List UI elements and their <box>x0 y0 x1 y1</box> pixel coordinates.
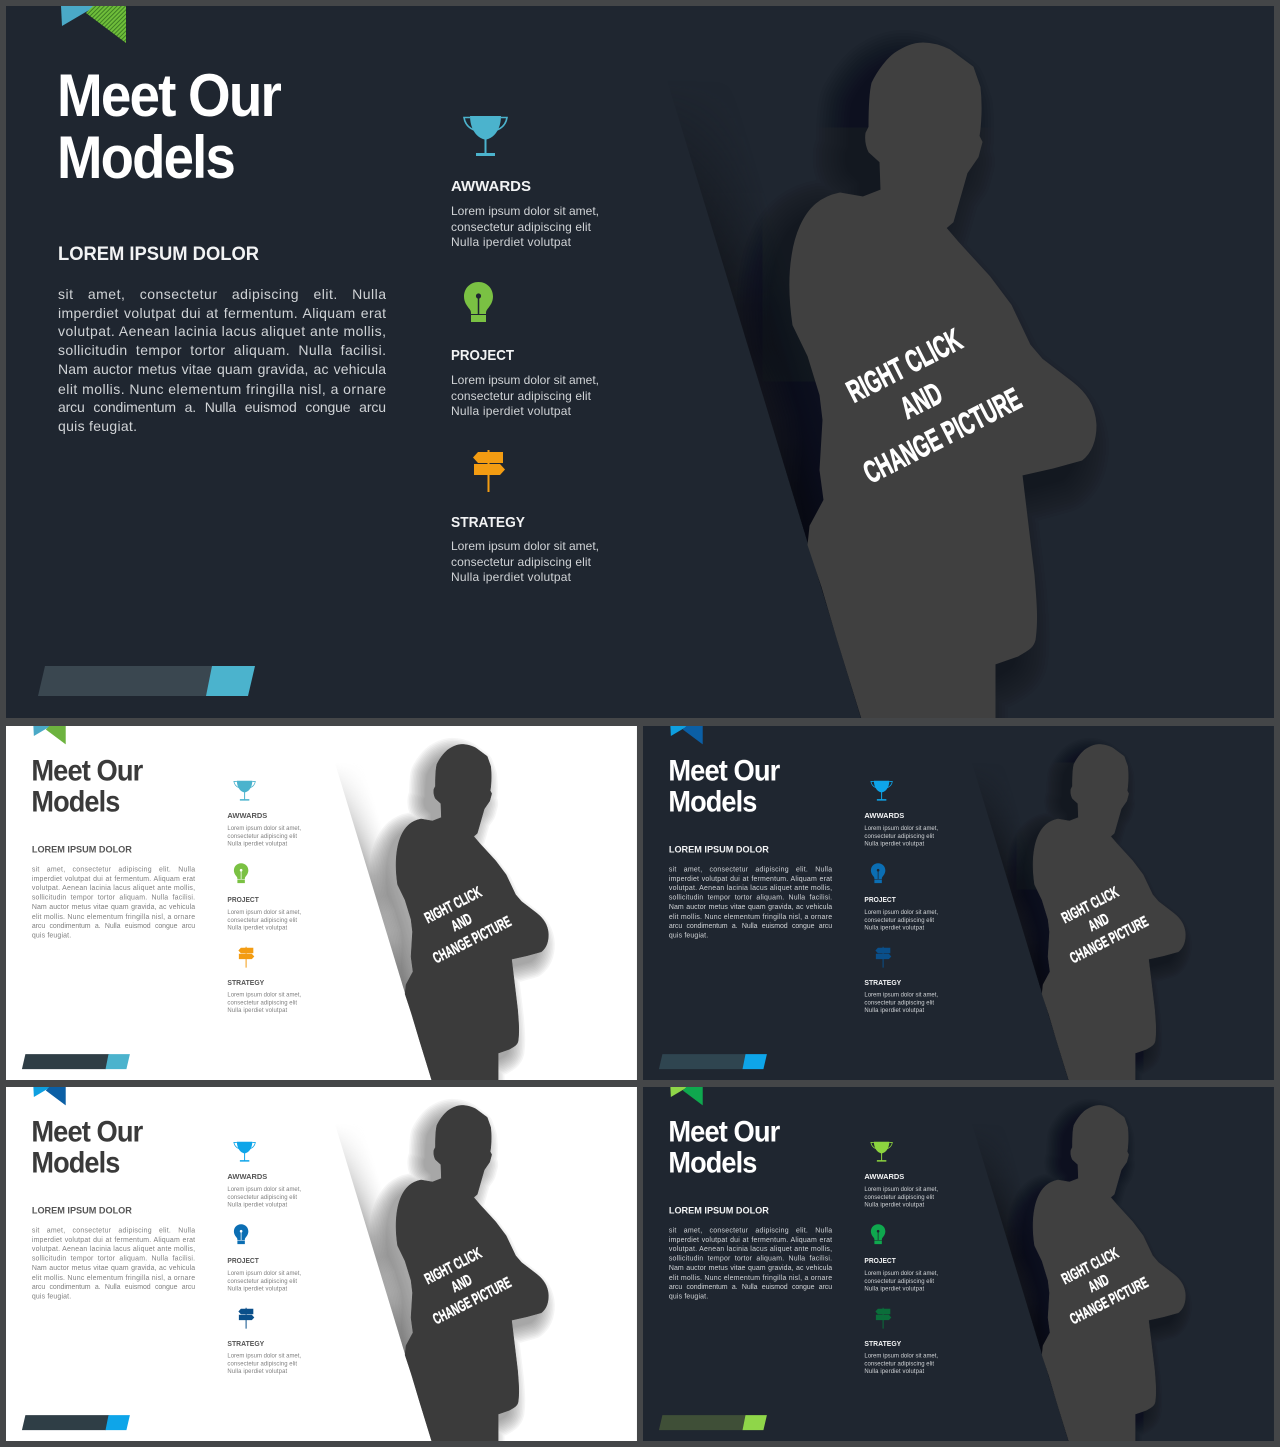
diagonal shadow <box>335 1124 504 1441</box>
item: project: Nulla iperdiet volutpat <box>451 404 572 418</box>
body text: elit mollis. Nunc elementum fringilla nisl, a ornare <box>669 914 832 921</box>
body text: elit mollis. Nunc elementum fringilla nisl, a ornare <box>669 1275 832 1282</box>
item: awwards <box>227 811 301 847</box>
item: awwards: AWWARDS <box>864 811 904 820</box>
icon: light bulb <box>871 1224 885 1244</box>
silhouette model <box>1033 744 1185 1081</box>
placeholder label <box>422 884 514 967</box>
accent bar <box>659 1415 767 1430</box>
body text: quis feugiat. <box>58 418 137 434</box>
item: project: Lorem ipsum dolor sit amet, <box>864 910 938 916</box>
body text: Nam auctor metus vitae quam gravida, ac vehicula <box>32 904 195 911</box>
placeholder label: RIGHT CLICK <box>841 322 968 409</box>
body text: volutpat. Aenean lacinia lacus aliquet ante mollis, <box>669 885 832 892</box>
title: Models <box>668 1147 757 1180</box>
item: project: consectetur adipiscing elit <box>864 918 934 924</box>
item: project <box>227 895 301 931</box>
item: project: Nulla iperdiet volutpat <box>227 1286 287 1292</box>
item: strategy: consectetur adipiscing elit <box>864 1000 934 1006</box>
placeholder label: CHANGE PICTURE <box>1067 1274 1151 1328</box>
body text: Nam auctor metus vitae quam gravida, ac vehicula <box>669 1265 832 1272</box>
accent bar <box>659 1054 767 1069</box>
item: awwards: consectetur adipiscing elit <box>451 220 592 234</box>
silhouette shadow <box>1023 1115 1175 1447</box>
item: awwards <box>451 178 599 249</box>
item: awwards: AWWARDS <box>451 178 531 195</box>
placeholder label: RIGHT CLICK <box>422 1245 485 1288</box>
body text: sit amet, consectetur adipiscing elit. Nulla <box>669 1228 832 1235</box>
item: awwards: Lorem ipsum dolor sit amet, <box>227 826 301 832</box>
title <box>33 760 143 812</box>
body text: quis feugiat. <box>32 932 71 939</box>
diagonal shadow <box>972 763 1141 1080</box>
item: strategy: Lorem ipsum dolor sit amet, <box>227 1353 301 1359</box>
item: awwards: Lorem ipsum dolor sit amet, <box>864 826 938 832</box>
body text: Nam auctor metus vitae quam gravida, ac vehicula <box>669 904 832 911</box>
accent bar <box>38 666 255 696</box>
item: strategy: STRATEGY <box>864 1339 901 1348</box>
body text <box>58 286 386 434</box>
placeholder label: AND <box>1086 911 1112 935</box>
body text: imperdiet volutpat dui at fermentum. Aliquam erat <box>32 876 195 883</box>
item: strategy <box>227 1339 301 1375</box>
item: project: Lorem ipsum dolor sit amet, <box>864 1271 938 1277</box>
icon: trophy <box>871 1142 892 1162</box>
item: strategy: Nulla iperdiet volutpat <box>451 570 572 584</box>
silhouette model <box>396 1105 548 1442</box>
item: project: Lorem ipsum dolor sit amet, <box>227 910 301 916</box>
body text: arcu condimentum a. Nulla euismod congue arcu <box>58 399 386 415</box>
title: Models <box>31 786 120 819</box>
body text: arcu condimentum a. Nulla euismod congue arcu <box>669 923 832 930</box>
item: strategy: STRATEGY <box>227 978 264 987</box>
item: awwards <box>227 1172 301 1208</box>
body text: elit mollis. Nunc elementum fringilla nisl, a ornare <box>32 914 195 921</box>
item: strategy: Lorem ipsum dolor sit amet, <box>451 539 599 553</box>
item: awwards: Nulla iperdiet volutpat <box>227 841 287 847</box>
item: project: Lorem ipsum dolor sit amet, <box>227 1271 301 1277</box>
subheading: LOREM IPSUM DOLOR <box>32 1205 132 1216</box>
body text: Nam auctor metus vitae quam gravida, ac vehicula <box>58 361 386 377</box>
title: Models <box>668 786 757 819</box>
body text: sit amet, consectetur adipiscing elit. Nulla <box>58 286 386 302</box>
body text: sollicitudin tempor tortor aliquam. Nulla facilisi. <box>669 895 832 902</box>
body text: quis feugiat. <box>669 1293 708 1300</box>
ribbon logo <box>33 726 66 744</box>
icon: signpost <box>238 1308 254 1329</box>
body text: imperdiet volutpat dui at fermentum. Aliquam erat <box>669 876 832 883</box>
item: awwards: Lorem ipsum dolor sit amet, <box>227 1187 301 1193</box>
placeholder label: AND <box>449 911 475 935</box>
silhouette shadow <box>386 1115 538 1447</box>
item: awwards: consectetur adipiscing elit <box>227 1195 297 1201</box>
body text: Nam auctor metus vitae quam gravida, ac vehicula <box>32 1265 195 1272</box>
placeholder label <box>844 327 1024 482</box>
panel: dark slide, green theme <box>643 1087 1274 1447</box>
placeholder label: RIGHT CLICK <box>422 884 485 927</box>
icon: light bulb <box>871 863 885 883</box>
ribbon logo <box>61 6 126 43</box>
item: project: PROJECT <box>451 347 514 364</box>
title: Meet Our <box>668 1116 781 1149</box>
icon: signpost <box>875 947 891 968</box>
ribbon logo <box>670 726 703 744</box>
diagonal shadow <box>696 171 860 716</box>
body text: volutpat. Aenean lacinia lacus aliquet ante mollis, <box>32 1246 195 1253</box>
body text: elit mollis. Nunc elementum fringilla nisl, a ornare <box>32 1275 195 1282</box>
item: project: consectetur adipiscing elit <box>451 389 592 403</box>
placeholder label <box>1059 884 1151 967</box>
item: strategy: consectetur adipiscing elit <box>451 555 592 569</box>
silhouette shadow <box>1023 754 1175 1090</box>
body text <box>669 1228 832 1300</box>
body text: volutpat. Aenean lacinia lacus aliquet ante mollis, <box>32 885 195 892</box>
body text <box>32 867 195 939</box>
placeholder label <box>1059 1245 1151 1328</box>
body text: quis feugiat. <box>669 932 708 939</box>
item: strategy: STRATEGY <box>227 1339 264 1348</box>
item: project <box>864 895 938 931</box>
panel: main dark slide <box>6 6 1274 739</box>
body text: elit mollis. Nunc elementum fringilla nisl, a ornare <box>58 381 386 397</box>
item: awwards <box>864 1172 938 1208</box>
body text: arcu condimentum a. Nulla euismod congue arcu <box>32 1284 195 1291</box>
item: strategy: Lorem ipsum dolor sit amet, <box>864 992 938 998</box>
item: project: consectetur adipiscing elit <box>864 1279 934 1285</box>
item: strategy: Nulla iperdiet volutpat <box>864 1008 924 1014</box>
item: awwards: Lorem ipsum dolor sit amet, <box>864 1187 938 1193</box>
title: Meet Our <box>31 1116 144 1149</box>
item: strategy: consectetur adipiscing elit <box>227 1000 297 1006</box>
item: awwards: consectetur adipiscing elit <box>227 834 297 840</box>
item: awwards: Nulla iperdiet volutpat <box>864 841 924 847</box>
placeholder label: AND <box>449 1272 475 1296</box>
body text: sollicitudin tempor tortor aliquam. Nulla facilisi. <box>669 1256 832 1263</box>
item: strategy <box>227 978 301 1014</box>
icon: trophy <box>234 1142 255 1162</box>
item: strategy: Nulla iperdiet volutpat <box>227 1369 287 1375</box>
body text: volutpat. Aenean lacinia lacus aliquet ante mollis, <box>669 1246 832 1253</box>
item: awwards: Nulla iperdiet volutpat <box>227 1202 287 1208</box>
title <box>670 760 780 812</box>
item: awwards: AWWARDS <box>227 811 267 820</box>
item: strategy: consectetur adipiscing elit <box>227 1361 297 1367</box>
silhouette model <box>790 43 1096 719</box>
ribbon logo <box>33 1087 66 1105</box>
item: project: consectetur adipiscing elit <box>227 1279 297 1285</box>
silhouette shadow <box>386 754 538 1090</box>
item: project <box>864 1256 938 1292</box>
item: project: PROJECT <box>864 895 896 904</box>
placeholder label: CHANGE PICTURE <box>858 381 1027 490</box>
body text <box>32 1228 195 1300</box>
item: strategy: STRATEGY <box>864 978 901 987</box>
silhouette shadow <box>770 63 1076 739</box>
item: project <box>227 1256 301 1292</box>
item: project <box>451 347 599 418</box>
title: Models <box>31 1147 120 1180</box>
placeholder label: AND <box>1086 1272 1112 1296</box>
body text: imperdiet volutpat dui at fermentum. Aliquam erat <box>669 1237 832 1244</box>
item: awwards: Nulla iperdiet volutpat <box>864 1202 924 1208</box>
item: project: Nulla iperdiet volutpat <box>227 925 287 931</box>
item: awwards: Nulla iperdiet volutpat <box>451 235 572 249</box>
item: awwards: Lorem ipsum dolor sit amet, <box>451 204 599 218</box>
item: project: PROJECT <box>227 895 259 904</box>
icon: light bulb <box>234 1224 248 1244</box>
silhouette model <box>1033 1105 1185 1442</box>
item: project: Nulla iperdiet volutpat <box>864 925 924 931</box>
diagonal shadow <box>339 776 432 1080</box>
body text: arcu condimentum a. Nulla euismod congue arcu <box>669 1284 832 1291</box>
item: awwards: AWWARDS <box>864 1172 904 1181</box>
placeholder label: RIGHT CLICK <box>1059 1245 1122 1288</box>
placeholder label: RIGHT CLICK <box>1059 884 1122 927</box>
item: strategy: Nulla iperdiet volutpat <box>227 1008 287 1014</box>
title <box>31 1116 144 1180</box>
icon: trophy <box>464 116 507 156</box>
panel: dark slide, blue theme <box>643 726 1274 1090</box>
item: strategy <box>864 1339 938 1375</box>
icon: signpost <box>238 947 254 968</box>
body text: sit amet, consectetur adipiscing elit. Nulla <box>32 1228 195 1235</box>
icon: trophy <box>234 781 255 801</box>
icon: light bulb <box>234 863 248 883</box>
icon: trophy <box>871 781 892 801</box>
placeholder label <box>422 1245 514 1328</box>
diagonal shadow <box>972 1124 1141 1441</box>
body text: arcu condimentum a. Nulla euismod congue arcu <box>32 923 195 930</box>
panel: white slide, blue theme <box>6 1087 637 1447</box>
item: awwards: consectetur adipiscing elit <box>864 1195 934 1201</box>
body text: imperdiet volutpat dui at fermentum. Aliquam erat <box>58 305 386 321</box>
body text: sit amet, consectetur adipiscing elit. Nulla <box>32 867 195 874</box>
body text: sollicitudin tempor tortor aliquam. Nulla facilisi. <box>32 895 195 902</box>
title: Models <box>57 124 234 191</box>
icon: signpost <box>875 1308 891 1329</box>
item: awwards: consectetur adipiscing elit <box>864 834 934 840</box>
item: awwards <box>864 811 938 847</box>
item: project: PROJECT <box>864 1256 896 1265</box>
item: strategy: consectetur adipiscing elit <box>864 1361 934 1367</box>
body text: sit amet, consectetur adipiscing elit. Nulla <box>669 867 832 874</box>
title: Meet Our <box>57 62 282 129</box>
subheading: LOREM IPSUM DOLOR <box>58 244 259 265</box>
item: project: Nulla iperdiet volutpat <box>864 1286 924 1292</box>
body text: volutpat. Aenean lacinia lacus aliquet ante mollis, <box>58 323 386 339</box>
item: awwards: AWWARDS <box>227 1172 267 1181</box>
panel: white slide, teal and green theme <box>6 726 637 1090</box>
item: project: Lorem ipsum dolor sit amet, <box>451 373 599 387</box>
subheading: LOREM IPSUM DOLOR <box>32 844 132 855</box>
body text: sollicitudin tempor tortor aliquam. Nulla facilisi. <box>32 1256 195 1263</box>
item: strategy: Lorem ipsum dolor sit amet, <box>864 1353 938 1359</box>
placeholder label: AND <box>895 376 948 426</box>
subheading: LOREM IPSUM DOLOR <box>669 844 769 855</box>
silhouette model <box>396 744 548 1081</box>
title: Meet Our <box>668 755 781 788</box>
item: strategy: Nulla iperdiet volutpat <box>864 1369 924 1375</box>
item: strategy: STRATEGY <box>451 514 525 531</box>
body text: quis feugiat. <box>32 1293 71 1300</box>
item: project: consectetur adipiscing elit <box>227 918 297 924</box>
title: Meet Our <box>31 755 144 788</box>
ribbon logo <box>670 1087 703 1105</box>
placeholder label: CHANGE PICTURE <box>430 913 514 967</box>
item: strategy <box>864 978 938 1014</box>
body text: imperdiet volutpat dui at fermentum. Aliquam erat <box>32 1237 195 1244</box>
body text <box>669 867 832 939</box>
item: strategy: Lorem ipsum dolor sit amet, <box>227 992 301 998</box>
icon: signpost <box>473 450 505 492</box>
title <box>668 1116 781 1180</box>
accent bar <box>22 1415 130 1430</box>
body text: sollicitudin tempor tortor aliquam. Nulla facilisi. <box>58 342 386 358</box>
item: project: PROJECT <box>227 1256 259 1265</box>
subheading: LOREM IPSUM DOLOR <box>669 1205 769 1216</box>
accent bar <box>22 1054 130 1069</box>
title <box>60 74 281 178</box>
placeholder label: CHANGE PICTURE <box>430 1274 514 1328</box>
icon: light bulb <box>464 282 493 322</box>
item: strategy <box>451 514 599 584</box>
placeholder label: CHANGE PICTURE <box>1067 913 1151 967</box>
